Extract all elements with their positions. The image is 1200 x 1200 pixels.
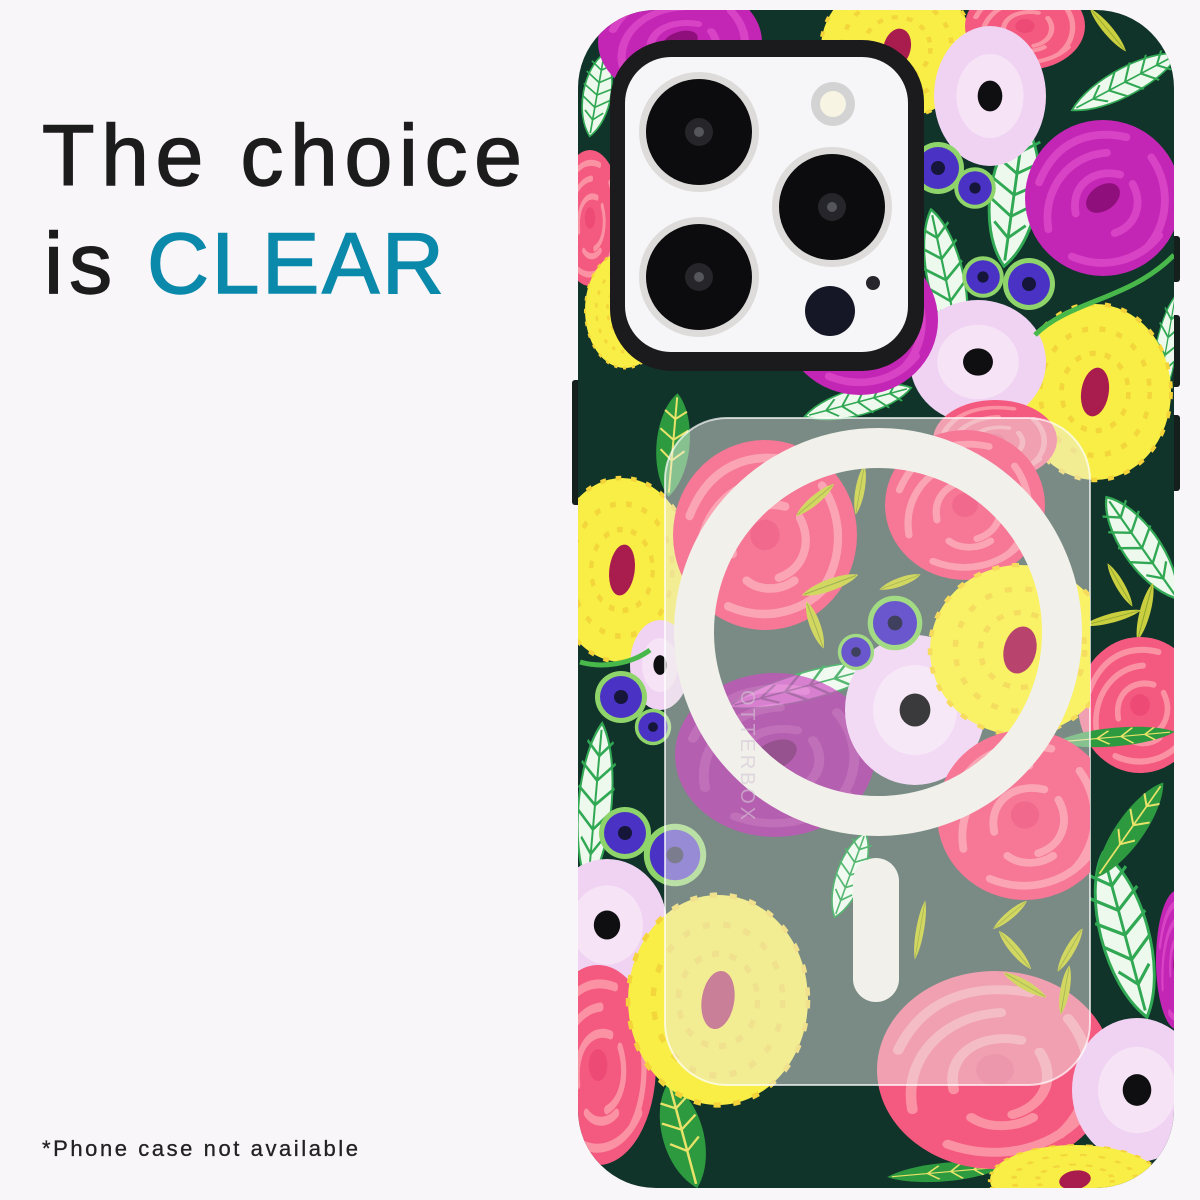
alignment pill: [853, 858, 899, 1002]
title word: CLEAR: CLEAR: [147, 216, 444, 312]
lens: right: [772, 147, 892, 267]
lidar sensor: [805, 286, 855, 336]
title: [42, 108, 522, 312]
camera module: [610, 40, 924, 371]
magnetic ring: [694, 448, 1062, 816]
camera bumper: [610, 40, 924, 371]
lens: bottom left: [639, 217, 759, 337]
microphone dot: [866, 276, 880, 290]
frosted mist over print: [665, 418, 1090, 1085]
side buttons: [572, 236, 1180, 505]
title line: The choice: The choice: [42, 108, 522, 204]
phone case with floral print: [540, 0, 1200, 1200]
print seen through card: [665, 418, 1113, 1085]
case body: [578, 10, 1174, 1188]
floral print: [578, 10, 1174, 1188]
embossed brand mark: OTTERBOX: [736, 690, 758, 820]
card panel: [665, 418, 1090, 1085]
footnote: *Phone case not available: [42, 1136, 358, 1161]
lens: top left: [639, 72, 759, 192]
clear magnetic card holder: [665, 418, 1113, 1085]
title word: is: is: [44, 216, 118, 312]
flash: [811, 82, 855, 126]
camera plate: [625, 57, 908, 352]
